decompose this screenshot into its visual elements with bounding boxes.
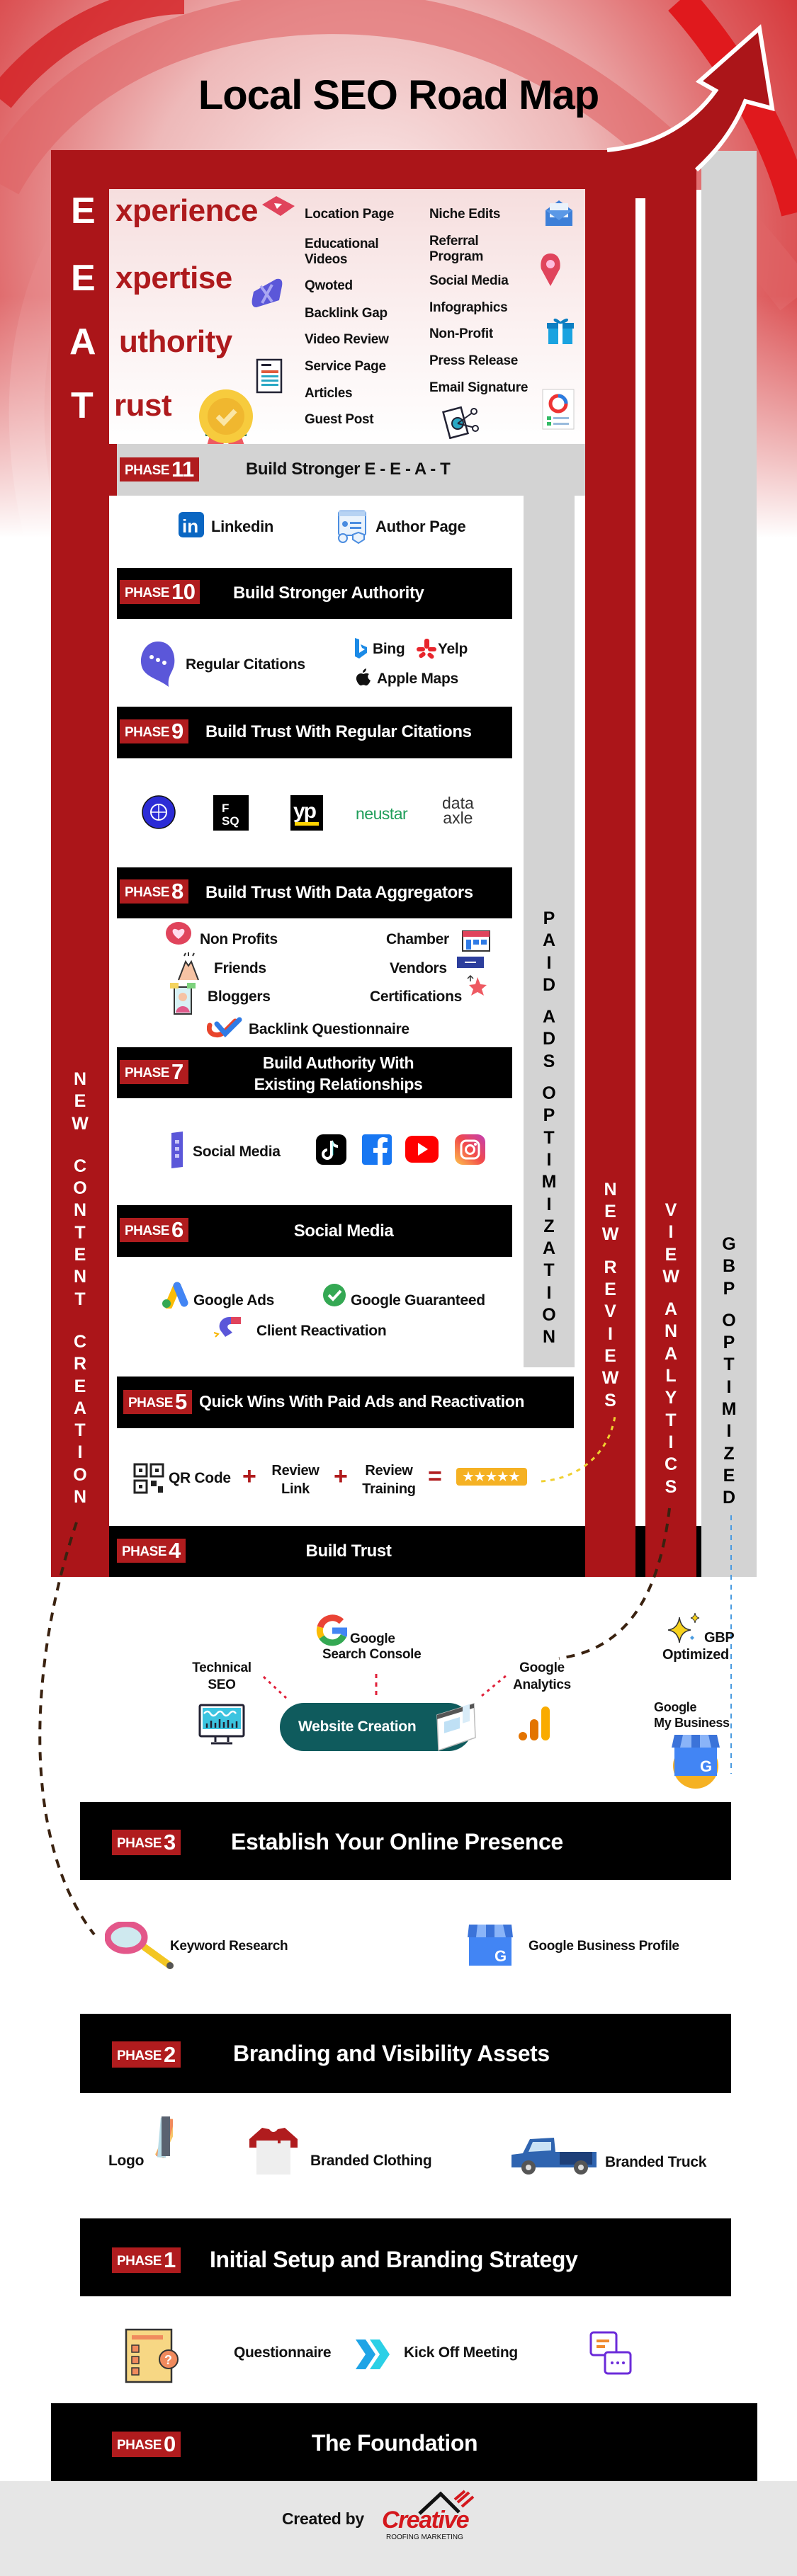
- gbp optimized: [662, 1613, 734, 1663]
- vertical label: new content creation: T C: [74, 1289, 86, 1352]
- vertical label: view analytics: I: [669, 1222, 673, 1242]
- vertical label: paid ads optimization: T: [543, 1260, 555, 1280]
- vertical label: paid ads optimization: A: [543, 930, 555, 950]
- list: content items column 2: Press Release: [429, 353, 518, 368]
- list: content items column 2: Niche Edits: [429, 207, 500, 222]
- google analytics: [513, 1660, 571, 1740]
- vertical label: gbp optimized: G: [722, 1234, 736, 1254]
- EEAT big letters: T: [71, 385, 94, 426]
- phase 7 bar: [117, 1047, 512, 1098]
- row: branding assets: Branded Truck: [605, 2154, 706, 2170]
- google search console: Google: [350, 1631, 395, 1646]
- google business profile: Google Business Profile: [528, 1939, 679, 1954]
- list: existing relationships: [166, 922, 490, 1038]
- vertical label: view analytics: S: [665, 1477, 677, 1497]
- phase 7 bar: PHASE7: [125, 1059, 183, 1084]
- icon: shirt: [249, 2128, 298, 2175]
- vertical label: paid ads optimization: A: [543, 1238, 555, 1258]
- phase 7 bar: Build Authority With: [263, 1054, 414, 1072]
- vertical label: paid ads optimization: I: [547, 1150, 551, 1170]
- vertical label: gbp optimized: P: [723, 1333, 735, 1352]
- row: data aggregator logos: neustar: [356, 804, 407, 823]
- list: content items column 2: Infographics: [429, 300, 507, 315]
- list: content items column 2: Email Signature: [429, 380, 528, 395]
- vertical label: gbp optimized: I: [727, 1377, 731, 1397]
- vertical label: new content creation: E: [74, 1245, 86, 1265]
- vertical label: view analytics: V: [665, 1200, 677, 1220]
- phase 10 bar: [117, 568, 512, 619]
- icon: trust badge: [199, 389, 253, 444]
- row: data aggregator logos: axle: [443, 809, 473, 827]
- row: regular citations: Bing: [373, 641, 405, 657]
- vertical label: paid ads optimization: P: [543, 1105, 555, 1125]
- row: reviews formula: +: [334, 1463, 348, 1490]
- vertical label: gbp optimized: Z: [723, 1444, 735, 1464]
- keyword research: [105, 1922, 288, 1969]
- list: content items column 1: Guest Post: [305, 412, 373, 427]
- phase 2 bar: Branding and Visibility Assets: [233, 2041, 550, 2066]
- google analytics: Google: [519, 1660, 565, 1675]
- vertical label: paid ads optimization: D: [543, 1029, 555, 1049]
- row: data aggregator logos: yp: [293, 799, 317, 823]
- vertical label: new content creation: [72, 1069, 89, 1507]
- list: content items column 1: Service Page: [305, 359, 386, 374]
- panel: EEAT section: [109, 189, 585, 444]
- phase 8 bar: [117, 867, 512, 918]
- list: content items column 2: Program: [429, 249, 483, 264]
- white content area: [109, 496, 524, 1377]
- vertical label: new content creation: O: [73, 1465, 87, 1485]
- google business profile: G: [494, 1947, 507, 1965]
- list: existing relationships: Non Profits: [200, 931, 278, 947]
- phase 1 bar: Initial Setup and Branding Strategy: [210, 2247, 577, 2272]
- icon: ticket: [252, 279, 282, 307]
- phase 1 bar: [80, 2218, 731, 2296]
- vertical label: new reviews: S: [604, 1391, 616, 1410]
- phase 9 bar: Build Trust With Regular Citations: [205, 722, 472, 741]
- row: data aggregator logos: F: [222, 802, 229, 815]
- red frame: [51, 150, 696, 1577]
- row: linkedin and author page: Linkedin: [211, 518, 273, 535]
- vertical label: new content creation: N: [74, 1200, 86, 1220]
- EEAT big letters: [69, 190, 258, 426]
- icon: video play: [262, 196, 295, 216]
- EEAT big letters: xpertise: [115, 261, 232, 295]
- list: content items column 1: Qwoted: [305, 278, 353, 293]
- phase 0 bar: [51, 2403, 757, 2481]
- phase 5 bar: Quick Wins With Paid Ads and Reactivation: [199, 1392, 524, 1410]
- vertical label: view analytics: Y: [665, 1388, 677, 1408]
- vertical label: view analytics: T: [665, 1410, 677, 1430]
- phase 5 bar: PHASE5: [128, 1389, 187, 1414]
- vertical label: gbp optimized: E: [723, 1466, 735, 1486]
- phase 10 bar: Build Stronger Authority: [233, 583, 424, 603]
- row: reviews formula: Review: [365, 1463, 413, 1478]
- google my business: G: [700, 1757, 712, 1775]
- arrow: [606, 24, 775, 171]
- connector lines: [38, 1417, 732, 1936]
- phase 6 bar: Social Media: [294, 1221, 393, 1241]
- phase 0 bar: PHASE0: [117, 2432, 176, 2456]
- row: paid ads and reactivation: Client Reactivation: [256, 1323, 386, 1339]
- list: existing relationships: Backlink Questionnaire: [249, 1021, 409, 1037]
- footer: Created by: [282, 2509, 364, 2528]
- row: branding assets: Branded Clothing: [310, 2153, 431, 2169]
- phase 1 bar: PHASE1: [117, 2247, 176, 2272]
- vertical label: new reviews: W R: [602, 1224, 618, 1277]
- vertical label: new reviews: I: [608, 1324, 613, 1344]
- row: regular citations: Regular Citations: [186, 656, 305, 673]
- row: questionnaire and kick off meeting: Questionnaire: [234, 2344, 331, 2361]
- vertical label: view analytics: L: [665, 1366, 677, 1386]
- vertical label: gbp optimized: [722, 1234, 736, 1508]
- row: linkedin and author page: Author Page: [375, 518, 466, 535]
- phase 2 bar: PHASE2: [117, 2042, 176, 2067]
- row: reviews formula: Training: [362, 1481, 416, 1497]
- google search console: Search Console: [322, 1647, 421, 1662]
- vertical label: new reviews: W: [602, 1368, 618, 1388]
- row: reviews formula: ★★★★★: [463, 1470, 521, 1483]
- vertical label: gbp optimized: M: [722, 1399, 736, 1419]
- row: paid ads and reactivation: Google Guaranteed: [351, 1292, 485, 1309]
- title: Local SEO Road Map: [198, 72, 599, 118]
- white gap between review and analytics columns: [635, 198, 645, 1526]
- icon: document: [256, 358, 282, 394]
- phase 4 bar: [109, 1526, 701, 1577]
- list: content items column 2: Referral: [429, 234, 478, 249]
- phase 7 bar: Existing Relationships: [254, 1075, 422, 1093]
- white gap right of paid ads column: [575, 496, 585, 1377]
- vertical label: view analytics: N: [665, 1321, 677, 1341]
- icon: color swatches: [155, 2116, 173, 2158]
- row: regular citations: Yelp: [438, 641, 468, 657]
- icon: mail: [546, 200, 572, 226]
- list: content items column 1: Location Page: [305, 207, 394, 222]
- phase 9 bar: PHASE9: [125, 719, 183, 743]
- phase 6 bar: [117, 1205, 512, 1257]
- vertical label: view analytics: [662, 1200, 679, 1497]
- vertical label: gbp optimized: P O: [722, 1279, 736, 1330]
- background header with red swooshes: [0, 0, 797, 528]
- phase 5 bar: [117, 1377, 574, 1428]
- row: paid ads and reactivation: [162, 1282, 485, 1339]
- vertical label: new content creation: E: [74, 1091, 86, 1111]
- vertical label: gbp optimized: D: [723, 1488, 735, 1508]
- vertical label: gbp optimized: I: [727, 1421, 731, 1441]
- vertical label: new content creation: T: [74, 1420, 86, 1440]
- vertical label: new content creation: A: [74, 1398, 86, 1418]
- vertical label: paid ads optimization: Z: [543, 1216, 555, 1236]
- website creation pill: Website Creation: [298, 1719, 416, 1735]
- icon: truck: [511, 2138, 597, 2175]
- icon: location pin: [541, 253, 560, 286]
- vertical label: new content creation: R: [74, 1354, 86, 1374]
- website creation pill: [280, 1703, 476, 1751]
- white gap right of analytics: [696, 190, 701, 1526]
- vertical label: new content creation: T: [74, 1223, 86, 1243]
- vertical label: new reviews: E: [604, 1280, 616, 1299]
- row: linkedin and author page: in: [182, 515, 198, 537]
- list: existing relationships: Certifications: [370, 988, 462, 1005]
- phase 8 bar: Build Trust With Data Aggregators: [205, 883, 473, 902]
- vertical label: paid ads optimization: I: [547, 1283, 551, 1303]
- gbp optimized: GBP: [704, 1630, 734, 1646]
- list: content items column 1: Videos: [305, 252, 347, 267]
- vertical label: paid ads optimization: S O: [542, 1052, 556, 1103]
- row: data aggregator logos: data: [442, 794, 474, 812]
- vertical label: view analytics: I: [669, 1432, 673, 1452]
- gray column: paid ads optimization: [524, 444, 575, 1367]
- phase 3 bar: PHASE3: [117, 1830, 176, 1854]
- EEAT big letters: xperience: [115, 193, 258, 228]
- row: social media: [171, 1132, 485, 1168]
- row: paid ads and reactivation: Google Ads: [193, 1292, 274, 1309]
- vertical label: new reviews: E: [604, 1346, 616, 1366]
- list: existing relationships: Chamber: [386, 931, 449, 947]
- phase 11 bar: [117, 444, 585, 496]
- EEAT big letters: A: [69, 321, 96, 363]
- vertical label: view analytics: A: [665, 1344, 677, 1364]
- phase 11 bar: Build Stronger E - E - A - T: [246, 460, 450, 479]
- row: reviews formula: +: [242, 1463, 256, 1490]
- red columns over phase 4 bar: [585, 1526, 635, 1577]
- vertical label: new content creation: E: [74, 1377, 86, 1396]
- icon: gift: [547, 319, 574, 344]
- technical seo: Technical: [192, 1660, 251, 1675]
- google my business: [654, 1700, 730, 1789]
- EEAT big letters: rust: [114, 388, 171, 423]
- google my business: Google: [654, 1700, 696, 1714]
- icon: analytics doc: [442, 406, 479, 439]
- vertical label: new reviews: N: [604, 1180, 617, 1199]
- phase 0 bar: The Foundation: [312, 2430, 477, 2456]
- row: questionnaire and kick off meeting: ?: [164, 2353, 172, 2367]
- vertical label: paid ads optimization: O: [542, 1305, 556, 1325]
- list: existing relationships: Bloggers: [208, 988, 271, 1005]
- vertical label: paid ads optimization: I: [547, 953, 551, 973]
- phase 10 bar: PHASE10: [125, 579, 195, 604]
- technical seo: SEO: [208, 1677, 236, 1692]
- EEAT big letters: E: [71, 190, 96, 232]
- vertical label: paid ads optimization: P: [543, 908, 555, 928]
- vertical label: gbp optimized: B: [723, 1256, 735, 1276]
- row: reviews formula: Review: [271, 1463, 320, 1478]
- technical seo: [192, 1660, 251, 1745]
- phase 3 bar: Establish Your Online Presence: [231, 1829, 563, 1854]
- row: reviews formula: =: [428, 1463, 442, 1490]
- vertical label: paid ads optimization: M: [542, 1172, 556, 1192]
- icon: report: [543, 389, 574, 429]
- list: content items column 2: [429, 207, 528, 395]
- phase 8 bar: PHASE8: [125, 879, 183, 904]
- vertical label: new reviews: [602, 1180, 619, 1410]
- phase 3 bar: [80, 1802, 731, 1880]
- logo: creative roofing marketing: ROOFING MARKETING: [386, 2534, 463, 2541]
- row: reviews formula: Link: [281, 1481, 310, 1497]
- list: content items column 1: Articles: [305, 386, 352, 401]
- vertical label: new content creation: N: [74, 1267, 86, 1287]
- list: content items column 2: Social Media: [429, 273, 509, 288]
- list: content items column 1: Backlink Gap: [305, 306, 388, 321]
- icon: heart: [166, 922, 191, 945]
- list: content items column 1: Educational: [305, 236, 378, 251]
- row: reviews formula: QR Code: [169, 1470, 231, 1486]
- list: existing relationships: Friends: [214, 960, 266, 976]
- logo: creative roofing marketing: [379, 2490, 485, 2546]
- EEAT big letters: E: [71, 258, 96, 299]
- row: data aggregator logos: [142, 794, 474, 831]
- google analytics: Analytics: [513, 1677, 571, 1692]
- row: regular citations: Apple Maps: [377, 671, 458, 687]
- row: data aggregator logos: SQ: [222, 814, 239, 828]
- phase 4 bar: Build Trust: [306, 1541, 391, 1561]
- EEAT big letters: uthority: [119, 324, 232, 359]
- footer: [0, 2481, 797, 2576]
- google business profile: [468, 1925, 679, 1966]
- vertical label: new content creation: O: [73, 1178, 87, 1198]
- vertical label: new content creation: I: [78, 1442, 82, 1462]
- vertical label: paid ads optimization: D A: [543, 975, 555, 1027]
- logo: creative roofing marketing: Creative: [382, 2507, 468, 2534]
- row: questionnaire and kick off meeting: Kick Off Meeting: [404, 2344, 518, 2361]
- vertical label: paid ads optimization: N: [543, 1327, 555, 1347]
- phase 9 bar: [117, 707, 512, 758]
- row: branding assets: [108, 2116, 707, 2175]
- vertical label: paid ads optimization: I: [547, 1195, 551, 1214]
- vertical label: new reviews: V: [604, 1301, 616, 1321]
- list: content items column 1: [305, 207, 394, 427]
- list: content items column 2: Non-Profit: [429, 326, 493, 341]
- gbp optimized: Optimized: [662, 1647, 729, 1663]
- keyword research: Keyword Research: [170, 1939, 288, 1954]
- list: content items column 1: Video Review: [305, 332, 389, 347]
- vertical label: paid ads optimization: T: [543, 1128, 555, 1148]
- list: existing relationships: Vendors: [390, 960, 447, 976]
- vertical label: new reviews: E: [604, 1202, 616, 1221]
- vertical label: view analytics: W A: [662, 1267, 679, 1319]
- row: questionnaire and kick off meeting: [123, 2325, 635, 2386]
- row: regular citations: [140, 638, 468, 687]
- google search console: [316, 1614, 421, 1662]
- row: linkedin and author page: [179, 511, 466, 544]
- vertical label: new content creation: W C: [72, 1114, 89, 1176]
- vertical label: new content creation: N: [74, 1069, 86, 1089]
- gray column: GBP optimized: [701, 151, 757, 1577]
- vertical label: new content creation: N: [74, 1487, 86, 1507]
- row: branding assets: Logo: [108, 2153, 144, 2169]
- phase 2 bar: [80, 2014, 731, 2093]
- vertical label: view analytics: C: [665, 1454, 677, 1474]
- phase 4 bar: PHASE4: [122, 1538, 181, 1563]
- vertical label: view analytics: E: [665, 1245, 677, 1265]
- vertical label: paid ads optimization: [542, 908, 556, 1347]
- phase 6 bar: PHASE6: [125, 1217, 183, 1242]
- row: social media: Social Media: [193, 1144, 281, 1160]
- row: reviews formula: [133, 1463, 527, 1497]
- phase 11 bar: PHASE11: [125, 457, 194, 481]
- google my business: My Business: [654, 1716, 730, 1730]
- vertical label: gbp optimized: T: [723, 1355, 735, 1374]
